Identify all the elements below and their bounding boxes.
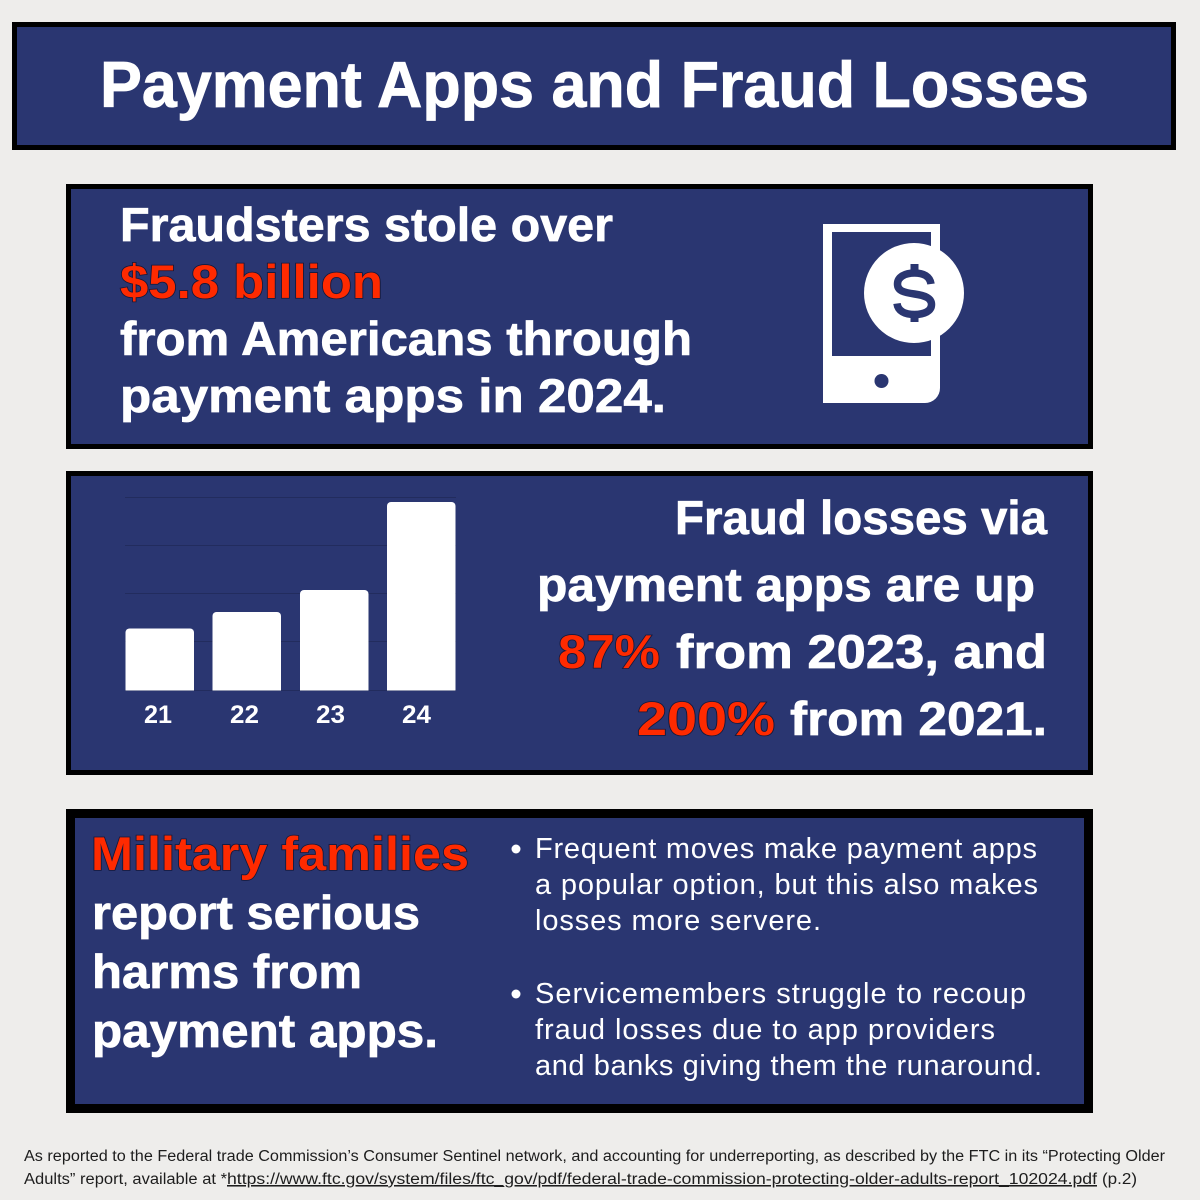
headline: fraudsters stole over $5.8 billion: from Americans through xyxy=(120,312,692,365)
footnote: source: https://www.ftc.gov/system/files/ftc_gov/pdf/federal-trade-commission-protecting-older-adults-report_102024.pdf xyxy=(227,1171,1098,1188)
bar chart: losses by year: 21 xyxy=(144,701,172,729)
headline: losses up 87% and 200%: 87% xyxy=(558,625,660,678)
footnote: source: As reported to the Federal trade Commission’s Consumer Sentinel network, and accounting for underreporting, as described by the FTC in its “Protecting Older xyxy=(24,1148,1165,1165)
panel: military families xyxy=(70,814,1088,1108)
title: Payment Apps and Fraud Losses xyxy=(100,48,1089,121)
headline: losses up 87% and 200%: from 2021. xyxy=(790,692,1047,745)
bullet: servicemembers struggle: and banks giving them the runaround. xyxy=(535,1050,1042,1082)
panel: total losses xyxy=(68,186,1090,446)
bullet: servicemembers struggle: fraud losses due to app providers xyxy=(535,1014,995,1046)
headline: losses up 87% and 200%: payment apps are up xyxy=(537,558,1035,611)
bar chart: losses by year: 22 xyxy=(230,701,259,729)
headline: losses up 87% and 200%: from 2023, and xyxy=(676,625,1047,678)
headline: military families report serious harms: report serious xyxy=(92,886,420,939)
headline: military families report serious harms: Military families xyxy=(91,827,469,880)
headline: losses up 87% and 200%: Fraud losses via xyxy=(675,491,1048,544)
bullet: frequent moves: Frequent moves make payment apps xyxy=(535,833,1037,865)
bullet: frequent moves: a popular option, but this also makes xyxy=(535,869,1038,901)
headline: losses up 87% and 200%: 200% xyxy=(637,692,775,745)
headline: fraudsters stole over $5.8 billion: payment apps in 2024. xyxy=(120,369,666,422)
headline: fraudsters stole over $5.8 billion: Fraudsters stole over xyxy=(120,198,613,251)
bullet: frequent moves: losses more servere. xyxy=(535,905,821,937)
panel: title banner xyxy=(14,24,1174,148)
bar chart: losses by year xyxy=(125,498,456,729)
icon: phone with dollar coin xyxy=(823,224,964,403)
headline: military families report serious harms xyxy=(91,827,469,1057)
footnote: source: (p.2) xyxy=(1102,1171,1137,1188)
headline: losses up 87% and 200% xyxy=(537,491,1048,745)
headline: fraudsters stole over $5.8 billion: $5.8 billion xyxy=(120,255,383,308)
footnote: source xyxy=(24,1148,1165,1188)
bullet: servicemembers struggle: Servicemembers struggle to recoup xyxy=(535,978,1026,1010)
headline: military families report serious harms: payment apps. xyxy=(92,1004,438,1057)
headline: military families report serious harms: harms from xyxy=(92,945,362,998)
bullet: servicemembers struggle xyxy=(512,978,1042,1082)
headline: fraudsters stole over $5.8 billion xyxy=(120,198,692,422)
panel: growth in losses xyxy=(68,474,1090,772)
footnote: source: Adults” report, available at * xyxy=(24,1171,227,1188)
bar chart: losses by year: 24 xyxy=(402,701,431,729)
bar chart: losses by year: 23 xyxy=(316,701,345,729)
bullet: frequent moves xyxy=(512,833,1038,937)
